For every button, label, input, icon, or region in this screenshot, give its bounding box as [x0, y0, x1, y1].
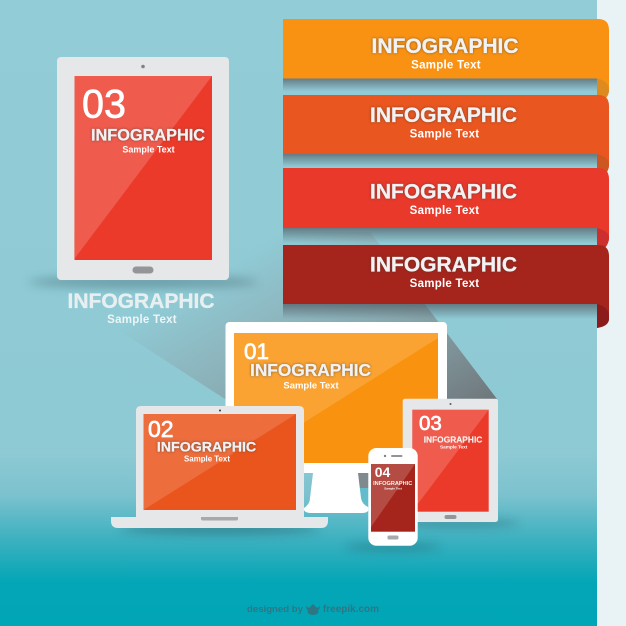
ribbon 1: Sample Text — [411, 60, 481, 72]
large tablet caption — [68, 290, 214, 326]
ribbon 4: Sample Text — [410, 278, 479, 290]
smartphone: Sample Text — [384, 486, 402, 490]
large tablet: 03 — [82, 82, 126, 126]
large tablet caption: Sample Text — [107, 314, 177, 326]
small tablet: Sample Text — [440, 444, 468, 450]
ribbon 4: INFOGRAPHIC — [370, 254, 517, 276]
desktop monitor: 01 — [244, 339, 269, 364]
footer credit: freepik.com — [323, 604, 379, 615]
large tablet: INFOGRAPHIC — [91, 126, 205, 144]
large tablet: Sample Text — [122, 144, 175, 154]
footer credit — [247, 604, 379, 615]
ribbon 2: Sample Text — [410, 128, 479, 140]
laptop: 02 — [148, 416, 174, 442]
large tablet caption: INFOGRAPHIC — [68, 290, 214, 313]
laptop: INFOGRAPHIC — [157, 440, 256, 456]
projection beam — [118, 232, 497, 399]
ribbon 1 — [283, 19, 609, 99]
small tablet: INFOGRAPHIC — [424, 434, 482, 444]
footer credit: designed by — [247, 604, 304, 615]
desktop monitor: Sample Text — [283, 380, 339, 392]
ribbon 2 — [283, 95, 609, 175]
ribbon 1: INFOGRAPHIC — [372, 35, 518, 58]
ribbon 3: INFOGRAPHIC — [370, 180, 517, 204]
right side strip — [597, 0, 626, 626]
ribbon 3 — [283, 168, 609, 248]
ribbon 2: INFOGRAPHIC — [370, 104, 517, 127]
ribbon stack — [283, 19, 609, 328]
large tablet — [28, 57, 258, 288]
desktop monitor: INFOGRAPHIC — [250, 360, 371, 380]
small tablet: 03 — [419, 412, 442, 435]
icon: freepik crown — [306, 604, 320, 615]
laptop — [111, 406, 328, 534]
smartphone: INFOGRAPHIC — [373, 481, 412, 487]
ribbon 4 — [283, 245, 609, 328]
desktop monitor — [226, 322, 447, 513]
smartphone — [345, 448, 441, 550]
ribbon 3: Sample Text — [410, 205, 479, 217]
smartphone: 04 — [375, 464, 390, 480]
small tablet — [400, 399, 520, 527]
laptop: Sample Text — [184, 454, 230, 464]
